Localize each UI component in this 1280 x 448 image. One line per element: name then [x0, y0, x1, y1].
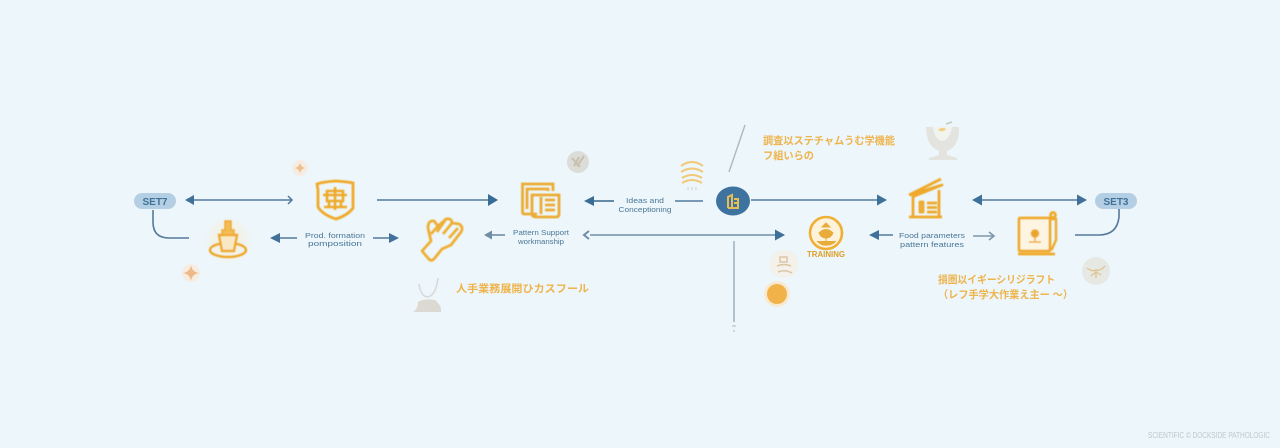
- annotation: upper right: 調査以ステチャムうむ学機能: [763, 134, 895, 147]
- icon: faint figure: [770, 250, 798, 278]
- icon: tree badge: TRAINING: [807, 250, 845, 259]
- icon: hand: [422, 219, 462, 260]
- caption: top centre: [618, 196, 672, 214]
- left pill: SET7: SET7: [142, 197, 168, 208]
- arrow: to hand: [484, 230, 505, 240]
- icon: shield: [317, 181, 353, 219]
- arrow: shield to document: [377, 194, 498, 206]
- annotation: lower right: （レフ手学大作業え主ー ～）: [938, 288, 1073, 301]
- caption: centre-left: [513, 228, 570, 246]
- left pill: SET7: [134, 193, 176, 209]
- arrows around right caption: [869, 230, 994, 240]
- line: down from node: [732, 241, 736, 331]
- caption: right: Food parameters: [899, 231, 965, 240]
- connector: SET7 to bottle icon: [153, 210, 189, 238]
- icon: house: [909, 179, 942, 217]
- connector: SET3 to notebook: [1075, 209, 1119, 235]
- annotation: upper right: フ組いらの: [763, 149, 814, 162]
- icon: document stack: [522, 184, 559, 217]
- caption: right: pattern features: [900, 240, 964, 249]
- line: up from node: [729, 125, 745, 172]
- caption: centre-left: Pattern Support: [513, 228, 570, 237]
- caption: left: Prod. formation: [305, 231, 365, 240]
- icon: faint medallion: [567, 151, 589, 173]
- caption: right: [899, 231, 965, 249]
- caption: top centre: Conceptioning: [618, 205, 672, 214]
- annotation: lower right: 損圏以イギーシリジラフト: [938, 273, 1055, 286]
- annotation: upper right: [763, 134, 895, 162]
- annotation: lower right: [938, 273, 1073, 301]
- arrow: house to SET3: [972, 194, 1087, 206]
- icon: bottle on a plate: [204, 216, 252, 264]
- right pill: SET3: SET3: [1103, 197, 1129, 208]
- arrow: long double: [584, 230, 785, 240]
- icon: faint plant pot: [413, 278, 441, 312]
- arrow pair around left caption: [270, 233, 399, 243]
- caption: left: pomposition: [308, 239, 362, 248]
- arrow: node to house: [751, 194, 887, 206]
- arrow: node to document: [584, 196, 703, 206]
- sparkle top left: [292, 160, 308, 176]
- sparkle bottom left: [182, 264, 200, 282]
- icon: notebook with pen: [1018, 212, 1056, 254]
- caption: left: [305, 231, 365, 248]
- icon: faint trophy bowl: [926, 122, 959, 160]
- icon: orange circle: [764, 281, 790, 307]
- arrow: SET7 to shield: [185, 195, 292, 205]
- annotation: lower left: 人手業務展開ひカスフール: [456, 282, 590, 295]
- caption: centre-left: workmanship: [517, 237, 564, 246]
- icon: tree badge: [807, 217, 845, 259]
- icon: faint wifi stack: [681, 162, 703, 190]
- icon: faint medallion right: [1082, 257, 1110, 285]
- right pill: SET3: [1095, 193, 1137, 209]
- central node: [716, 186, 750, 216]
- caption: top centre: Ideas and: [626, 196, 664, 205]
